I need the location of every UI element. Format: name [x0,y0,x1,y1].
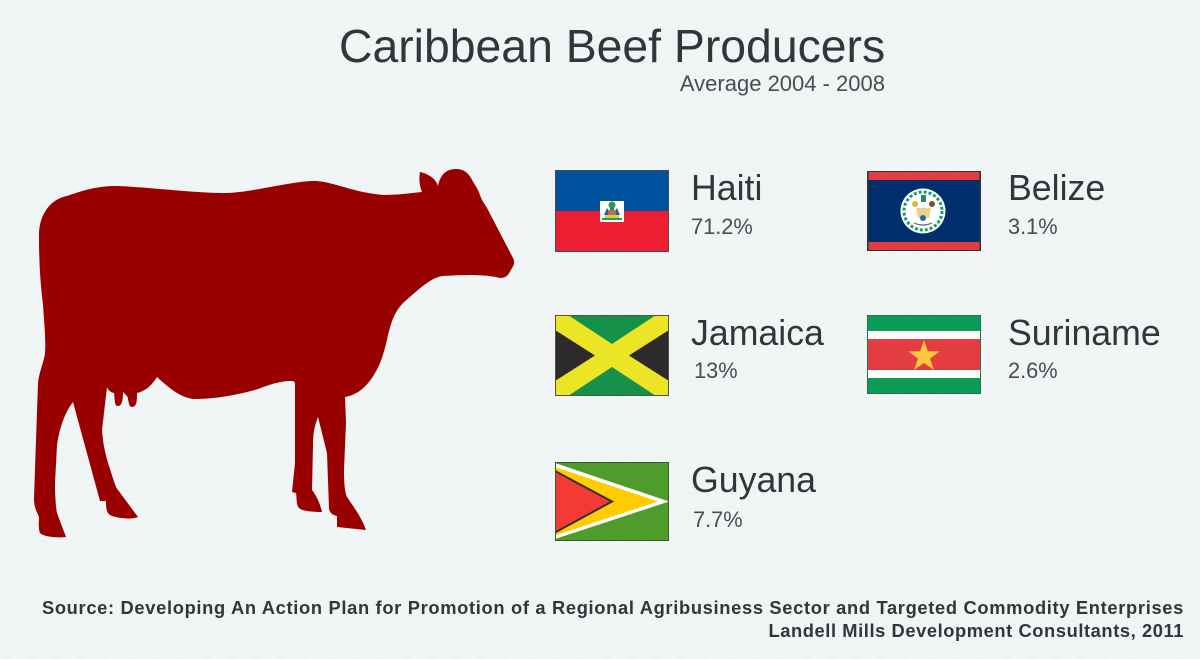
value: Suriname: 2.6% [1008,358,1058,383]
flag: Haiti [555,170,669,252]
source note: Landell Mills Development Consultants, 2011 [769,620,1184,641]
value: Haiti: 71.2% [691,214,753,239]
subtitle: Average 2004 - 2008 [680,71,885,96]
label: Guyana: Guyana [691,460,816,500]
value: Guyana: 7.7% [693,507,743,532]
flag: Suriname [867,315,981,394]
flag: Guyana [555,462,669,541]
flag: Jamaica [555,315,669,396]
value: Belize: 3.1% [1008,214,1058,239]
source note: Source: Developing An Action Plan for Promotion of a Regional Agribusiness Sector and Targeted Commodity Enterprises [42,597,1184,618]
flag: Belize [867,171,981,251]
label: Suriname: Suriname [1008,313,1161,353]
label: Jamaica: Jamaica [691,313,824,353]
title: Caribbean Beef Producers [339,20,885,72]
value: Jamaica: 13% [694,358,738,383]
label: Belize: Belize [1008,168,1105,208]
source note [42,597,1184,641]
label: Haiti: Haiti [691,168,762,208]
